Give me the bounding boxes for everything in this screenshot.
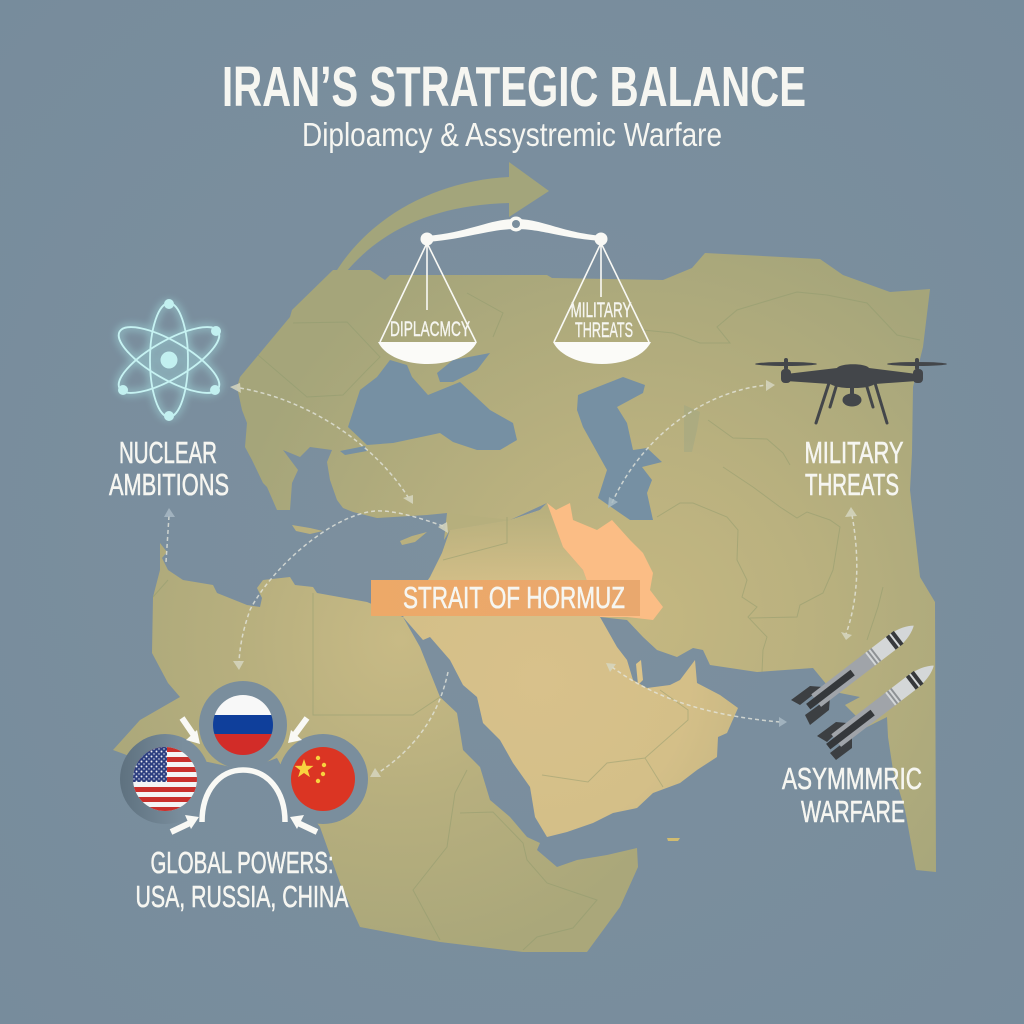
water: Sea of Azov bbox=[437, 353, 490, 382]
balance scale bbox=[378, 216, 651, 364]
land: Europe and Asia bbox=[237, 253, 936, 872]
strait of hormuz banner bbox=[371, 580, 640, 616]
flag: Russia bbox=[199, 681, 287, 769]
label: military threats: THREATS bbox=[805, 467, 899, 502]
flag: China bbox=[278, 734, 368, 824]
icon: atom bbox=[110, 299, 228, 421]
curved arrow bbox=[328, 162, 549, 286]
label: asymmetric warfare: WARFARE bbox=[801, 794, 905, 829]
land: Arabian peninsula and Levant bbox=[403, 503, 738, 837]
dotted connector arrows bbox=[164, 380, 857, 777]
land: Syria and Iraq shading bbox=[420, 503, 590, 590]
water: Sea of Marmara bbox=[340, 446, 367, 455]
inward arrows bbox=[171, 718, 317, 832]
left pan bbox=[378, 342, 477, 364]
missile lower bbox=[817, 659, 939, 760]
missile upper bbox=[791, 619, 919, 725]
water: Aral Sea bbox=[684, 405, 700, 452]
water: Black Sea bbox=[348, 360, 517, 450]
label: nuclear ambitions: AMBITIONS bbox=[109, 467, 229, 502]
label: global powers: USA, RUSSIA, CHINA bbox=[136, 879, 349, 914]
strait of hormuz banner: STRAIT OF HORMUZ bbox=[403, 580, 625, 615]
label: asymmetric warfare bbox=[782, 761, 922, 829]
label: global powers bbox=[136, 845, 349, 914]
label: nuclear ambitions bbox=[109, 435, 229, 502]
right pan bbox=[553, 342, 651, 364]
global powers flags bbox=[120, 681, 368, 832]
icon: drone bbox=[755, 358, 947, 423]
label: global powers: GLOBAL POWERS: bbox=[150, 845, 334, 880]
label: nuclear ambitions: NUCLEAR bbox=[119, 435, 217, 470]
label: asymmetric warfare: ASYMMMRIC bbox=[782, 761, 922, 796]
flag: USA bbox=[120, 734, 210, 824]
scale beam bbox=[428, 219, 602, 242]
islands bbox=[292, 525, 680, 841]
land: Qatar bbox=[636, 660, 643, 685]
borders bbox=[153, 292, 920, 950]
arch bbox=[202, 770, 285, 822]
label: military threats: MILITARY bbox=[804, 435, 904, 470]
left pan label: DIPLACMCY bbox=[390, 318, 470, 341]
water: Caspian Sea bbox=[577, 377, 662, 520]
land: Syrian coast bbox=[444, 513, 510, 540]
right pan label: MILITARY bbox=[570, 299, 632, 322]
subtitle: Diploamcy & Assystremic Warfare bbox=[302, 116, 722, 153]
icon: missiles bbox=[791, 619, 939, 760]
Iran highlight bbox=[547, 503, 663, 620]
label: military threats bbox=[804, 435, 904, 502]
land: Africa bbox=[113, 543, 638, 952]
map: land masses bbox=[113, 253, 936, 952]
balance scale: THREATS bbox=[575, 319, 633, 342]
